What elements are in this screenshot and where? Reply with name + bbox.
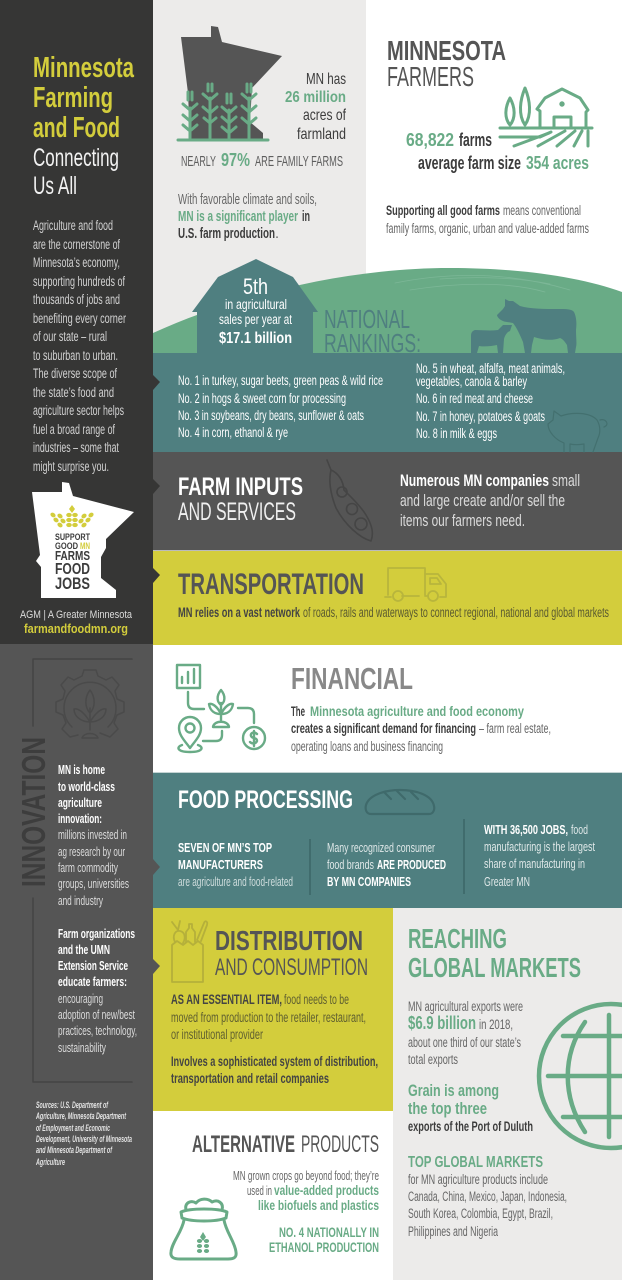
rankings list left (178, 373, 383, 440)
innovation text: sustainability (58, 1040, 106, 1055)
sources note: Agriculture (35, 1157, 65, 1167)
barn: 5th in agricultural sales: $17.1 billion (219, 330, 292, 347)
text: supporting all good farms: Supporting all good farms (386, 203, 500, 218)
sidebar intro paragraph: The diverse scope of (33, 366, 117, 381)
stat: 26 million acres: acres of (303, 107, 346, 124)
column: seven top manufacturers: are agriculture and food-related (178, 874, 293, 889)
text: exports: in 2018, (479, 1017, 513, 1032)
icon: bread loaf (366, 790, 434, 814)
logo: Support Good MN Farms Food Jobs: SUPPORT (55, 532, 90, 543)
text: distribution (171, 992, 378, 1086)
icon: barn and trees (500, 88, 592, 146)
barn: 5th in agricultural sales (192, 259, 318, 353)
sidebar intro paragraph: to suburban to urban. (33, 348, 118, 363)
heading: national rankings (324, 304, 421, 358)
heading: financial: FINANCIAL (291, 661, 413, 696)
text: alternative products: like biofuels and plastics (258, 1197, 379, 1213)
text: financial (291, 703, 551, 754)
text: numerous MN companies: items our farmers need. (400, 512, 525, 530)
stat: 26 million acres: 26 million (285, 89, 346, 106)
heading: food processing: FOOD PROCESSING (178, 786, 353, 814)
sidebar intro paragraph: the state’s food and (33, 385, 114, 400)
text: financial: The (291, 703, 305, 719)
stat: 68,822 farms: 68,822 (406, 130, 454, 150)
text: numerous MN companies: and large create and/or sell the (400, 492, 565, 510)
innovation text: and industry (58, 893, 103, 908)
hill (153, 268, 622, 353)
innovation frame (33, 659, 132, 1082)
heading: Minnesota farmers: MINNESOTA (387, 35, 506, 66)
stat: 68,822 farms: average farm size (418, 153, 521, 173)
text: financial: – farm real estate, (479, 721, 551, 736)
heading: farm inputs and services (178, 473, 303, 526)
innovation text: innovation: (58, 811, 102, 826)
text: exports: $6.9 billion (408, 1013, 476, 1033)
text: grain top three: exports of the Port of Duluth (408, 1119, 533, 1134)
text: climate and soils: U.S. farm production (178, 226, 275, 242)
text: alternative products: NO. 4 NATIONALLY IN (279, 1224, 379, 1240)
heading: Minnesota farmers (387, 35, 506, 92)
sidebar title: Connecting (33, 144, 119, 172)
sidebar intro paragraph: Agriculture and food (33, 218, 113, 233)
column: consumer brands: ARE PRODUCED (377, 857, 446, 872)
innovation text: ag research by our (58, 844, 125, 859)
text: exports: total exports (408, 1052, 458, 1067)
heading: Minnesota farmers: FARMERS (387, 61, 474, 92)
innovation text: Extension Service (58, 958, 128, 973)
text: climate and soils: MN is a significant player (178, 209, 298, 225)
innovation text: Farm organizations (58, 926, 135, 941)
sidebar intro paragraph (33, 218, 126, 474)
logo: Support Good MN Farms Food Jobs: GOOD (55, 541, 78, 552)
column: 36,500 jobs: food (571, 822, 588, 837)
sidebar intro paragraph: Minnesota’s economy, (33, 255, 120, 270)
column: seven top manufacturers: MANUFACTURERS (178, 857, 263, 872)
text: distribution: food needs to be (284, 992, 349, 1007)
stat: 97% family farms: 97% (221, 150, 250, 170)
sidebar title: and Food (33, 112, 120, 144)
stat: 97% family farms (181, 150, 343, 170)
barn: 5th in agricultural sales: 5th (243, 274, 268, 299)
sidebar intro paragraph: industries – some that (33, 440, 119, 455)
sidebar intro paragraph: supporting hundreds of (33, 274, 125, 289)
sidebar intro paragraph: benefiting every corner (33, 311, 126, 326)
text: climate and soils (178, 192, 317, 242)
innovation text: educate farmers: (58, 974, 127, 989)
sources note: Development, University of Minnesota (36, 1134, 132, 1144)
rankings list right: No. 8 in milk & eggs (416, 426, 497, 441)
website link: farmandfoodmn.org (24, 621, 128, 636)
icon: financial flow (177, 665, 265, 752)
sidebar intro paragraph: thousands of jobs and (33, 292, 120, 307)
innovation text: to world-class (58, 779, 115, 794)
heading: distribution and consumption: DISTRIBUTION (215, 925, 363, 956)
rankings list left: No. 3 in soybeans, dry beans, sunflower & oats (178, 408, 364, 423)
column: seven top manufacturers: SEVEN OF MN’S TOP (178, 840, 272, 855)
innovation text: encouraging (58, 991, 103, 1006)
text: supporting all good farms: means conventional (503, 203, 581, 218)
heading: transportation: TRANSPORTATION (178, 568, 364, 601)
innovation vertical heading: INNOVATION (15, 737, 52, 887)
text: climate and soils: . (275, 226, 279, 242)
heading: national rankings: NATIONAL (324, 304, 410, 334)
rankings list right (416, 361, 565, 441)
innovation text: agriculture (58, 795, 102, 810)
sources note (35, 1100, 132, 1167)
heading: reaching global markets (408, 923, 581, 983)
column: consumer brands: BY MN COMPANIES (327, 874, 411, 889)
innovation text: millions invested in (58, 827, 127, 842)
logo: Support Good MN Farms Food Jobs: FARMS (55, 548, 90, 563)
heading: distribution and consumption (215, 925, 368, 981)
text: alternative products: MN grown crops go beyond food; they’re (233, 1168, 379, 1183)
text: numerous MN companies: small (552, 472, 580, 490)
stat: 68,822 farms (406, 130, 589, 173)
text: top global markets: for MN agriculture products include (408, 1172, 548, 1187)
rankings list left: No. 2 in hogs & sweet corn for processing (178, 391, 346, 406)
stat: 97% family farms: NEARLY (181, 153, 216, 170)
innovation text: practices, technology, (58, 1023, 137, 1038)
sidebar title (33, 52, 135, 200)
innovation text: farm commodity (58, 860, 118, 875)
heading: alternative products: ALTERNATIVE (192, 1131, 295, 1158)
stat: 26 million acres: MN has (306, 71, 346, 88)
icon: grocery bag (172, 921, 207, 982)
text: distribution: moved from production to the retailer, restaurant, (171, 1010, 366, 1025)
sources note: and Minnesota Department of (36, 1145, 113, 1155)
logo: Support Good MN Farms Food Jobs: MN (80, 541, 90, 552)
stat: 68,822 farms: farms (459, 130, 492, 150)
text: alternative products (233, 1168, 379, 1255)
icon: globe (539, 1004, 622, 1148)
text: exports: MN agricultural exports were (408, 999, 523, 1014)
icon: truck (385, 568, 446, 601)
heading: alternative products: PRODUCTS (301, 1131, 379, 1158)
icon: pig outline (548, 411, 607, 452)
text: transportation network (178, 605, 609, 620)
icon: Minnesota map with wheat (178, 26, 282, 140)
text: alternative products: used in (247, 1183, 272, 1198)
icon: innovation gear with plant (56, 670, 124, 738)
text: supporting all good farms (386, 203, 589, 236)
innovation text: groups, universities (58, 876, 129, 891)
stat: 68,822 farms: 354 acres (526, 153, 589, 173)
heading: farm inputs and services: AND SERVICES (178, 498, 296, 526)
sources note: Agriculture, Minnesota Department (35, 1111, 127, 1121)
heading: reaching global markets: REACHING (408, 923, 507, 954)
column: 36,500 jobs (484, 822, 595, 889)
icon: cow and calf (471, 299, 576, 353)
sources note: of Employment and Economic (36, 1123, 110, 1133)
text: exports: about one third of our state’s (408, 1035, 521, 1050)
section arrows (153, 375, 160, 974)
sidebar title: Farming (33, 82, 113, 114)
sidebar intro paragraph: are the cornerstone of (33, 237, 120, 252)
text: grain top three (408, 1081, 533, 1134)
column: consumer brands: food brands (327, 857, 374, 872)
logo: Support Good MN Farms Food Jobs (32, 482, 134, 598)
text: top global markets: Philippines and Nigeria (408, 1224, 498, 1239)
sidebar credit: AGM | A Greater Minnesota (20, 609, 133, 621)
barn: 5th in agricultural sales: in agricultural (225, 297, 287, 312)
rankings list right: vegetables, canola & barley (416, 374, 527, 389)
sources note: Sources: U.S. Department of (36, 1100, 109, 1110)
rankings list left: No. 4 in corn, ethanol & rye (178, 425, 288, 440)
column: 36,500 jobs: WITH 36,500 JOBS, (484, 822, 568, 837)
text: distribution: transportation and retail companies (171, 1071, 329, 1086)
text: grain top three: the top three (408, 1099, 487, 1118)
logo: Support Good MN Farms Food Jobs: JOBS (55, 574, 90, 593)
text: numerous MN companies: Numerous MN companies (400, 472, 549, 490)
column: consumer brands (327, 840, 446, 889)
sidebar intro paragraph: might surprise you. (33, 459, 109, 474)
sidebar intro paragraph: of our state – rural (33, 329, 107, 344)
rankings list right: No. 6 in red meat and cheese (416, 391, 533, 406)
text: distribution: or institutional provider (171, 1027, 263, 1042)
text: distribution: AS AN ESSENTIAL ITEM, (171, 992, 282, 1007)
rankings list left: No. 1 in turkey, sugar beets, green peas & wild rice (178, 373, 383, 388)
text: top global markets: TOP GLOBAL MARKETS (408, 1154, 543, 1171)
stat: 97% family farms: ARE FAMILY FARMS (255, 153, 343, 170)
text: climate and soils: With favorable climate and soils, (178, 192, 317, 208)
text: distribution: Involves a sophisticated system of distribution, (171, 1054, 378, 1069)
text: alternative products: ETHANOL PRODUCTION (269, 1239, 379, 1255)
text: alternative products: value-added products (274, 1182, 379, 1198)
text: financial: creates a significant demand for financing (291, 721, 476, 736)
sidebar title: Minnesota (33, 52, 135, 84)
heading: farm inputs and services: FARM INPUTS (178, 473, 303, 501)
innovation text: and the UMN (58, 942, 110, 957)
innovation text: MN is home (58, 762, 105, 777)
innovation text (58, 762, 137, 1055)
barn: 5th in agricultural sales: sales per year at (219, 312, 292, 327)
logo: Support Good MN Farms Food Jobs: FOOD (55, 561, 90, 578)
rankings list right: No. 7 in honey, potatoes & goats (416, 409, 545, 424)
column: consumer brands: Many recognized consumer (327, 840, 435, 855)
text: financial: Minnesota agriculture and food economy (310, 703, 524, 719)
column: 36,500 jobs: Greater MN (484, 874, 530, 889)
sidebar title: Us All (33, 172, 77, 200)
dividers (310, 819, 464, 895)
innovation text: adoption of new/best (58, 1007, 135, 1022)
heading: distribution and consumption: AND CONSUMPTION (215, 954, 368, 981)
sidebar intro paragraph: fuel a broad range of (33, 422, 115, 437)
column: seven top manufacturers (178, 840, 293, 889)
icon: grain sack (171, 1199, 236, 1259)
text: financial: operating loans and business financing (291, 739, 443, 754)
icon: seed pod (327, 460, 372, 541)
stat: 26 million acres (285, 71, 346, 143)
heading: national rankings: RANKINGS: (324, 328, 421, 358)
sidebar intro paragraph: agriculture sector helps (33, 403, 124, 418)
text: transportation network: MN relies on a vast network (178, 605, 300, 620)
text: exports (408, 999, 523, 1067)
text: numerous MN companies (400, 472, 580, 530)
text: climate and soils: in (302, 209, 310, 225)
stat: 26 million acres: farmland (297, 126, 346, 143)
text: grain top three: Grain is among (408, 1081, 499, 1100)
text: top global markets (408, 1154, 567, 1239)
